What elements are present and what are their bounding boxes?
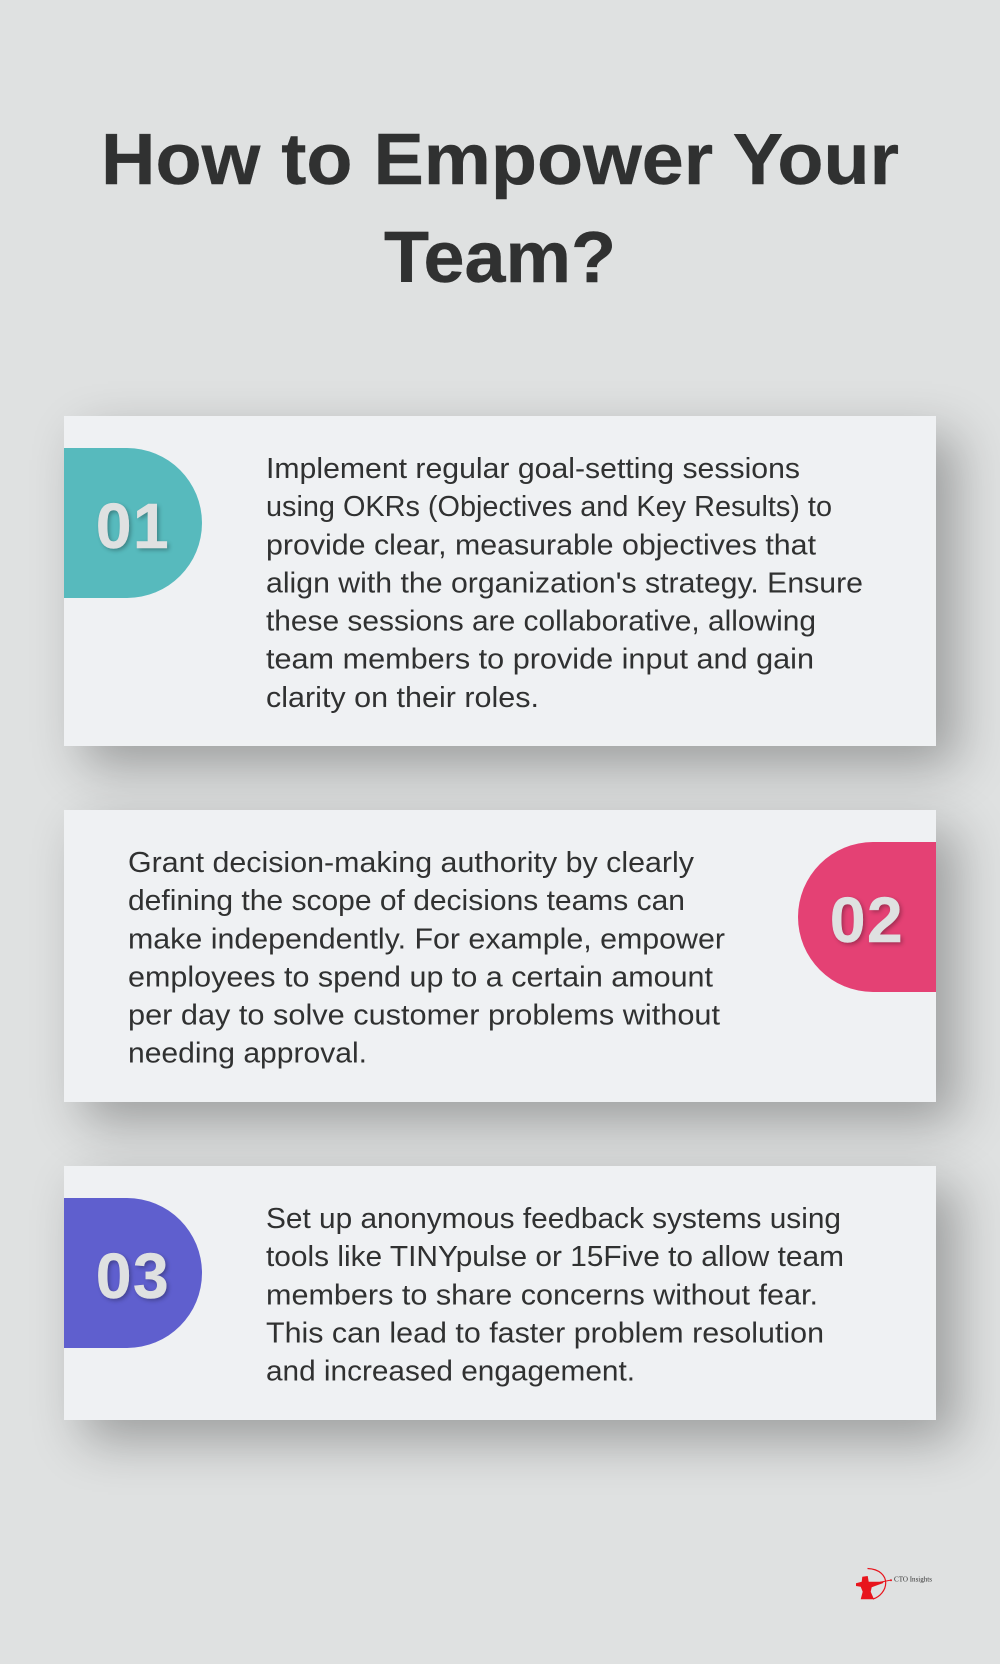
text: step 01 description: team members to provide input and gain <box>266 643 814 675</box>
badge: 01 <box>64 448 202 598</box>
text: step 01 description <box>266 452 862 713</box>
badge: 01: 01 <box>96 490 170 562</box>
text: step 01 description: align with the organization's strategy. Ensure <box>266 567 862 599</box>
text: step 02 description <box>128 846 726 1069</box>
panel: step 02 <box>64 810 936 1102</box>
badge: 03 <box>64 1198 202 1348</box>
title <box>101 120 899 298</box>
text: step 03 description: Set up anonymous feedback systems using <box>266 1202 840 1234</box>
title: Team? <box>384 218 616 298</box>
badge: 02: 02 <box>830 884 904 956</box>
text: step 02 description: defining the scope of decisions teams can <box>128 885 685 917</box>
text: step 01 description: these sessions are collaborative, allowing <box>266 605 816 637</box>
icon: archer silhouette <box>856 1568 892 1599</box>
text: step 03 description: and increased engagement. <box>266 1355 634 1387</box>
text: step 01 description: Implement regular goal-setting sessions <box>266 452 800 484</box>
text: step 01 description: clarity on their roles. <box>266 681 538 713</box>
text: step 03 description: tools like TINYpulse or 15Five to allow team <box>266 1241 844 1273</box>
panel: step 03 <box>64 1166 936 1420</box>
text: step 01 description: provide clear, measurable objectives that <box>266 529 816 561</box>
text: step 01 description: using OKRs (Objectives and Key Results) to <box>266 491 832 523</box>
text: step 02 description: needing approval. <box>128 1037 367 1069</box>
text: step 02 description: employees to spend up to a certain amount <box>128 961 713 993</box>
text: step 02 description: per day to solve customer problems without <box>128 999 720 1031</box>
logo: CTO Insights archer <box>856 1568 932 1600</box>
text: step 03 description: members to share concerns without fear. <box>266 1279 818 1311</box>
badge: 02 <box>798 842 936 992</box>
text: step 03 description <box>266 1202 844 1387</box>
text: step 02 description: Grant decision-making authority by clearly <box>128 846 695 878</box>
text: step 03 description: This can lead to faster problem resolution <box>266 1317 824 1349</box>
text: step 02 description: make independently. For example, empower <box>128 923 726 955</box>
title: How to Empower Your <box>101 120 899 200</box>
badge: 03: 03 <box>96 1240 170 1312</box>
logo wordmark: CTO Insights <box>894 1575 932 1584</box>
panel: step 01 <box>64 416 936 746</box>
